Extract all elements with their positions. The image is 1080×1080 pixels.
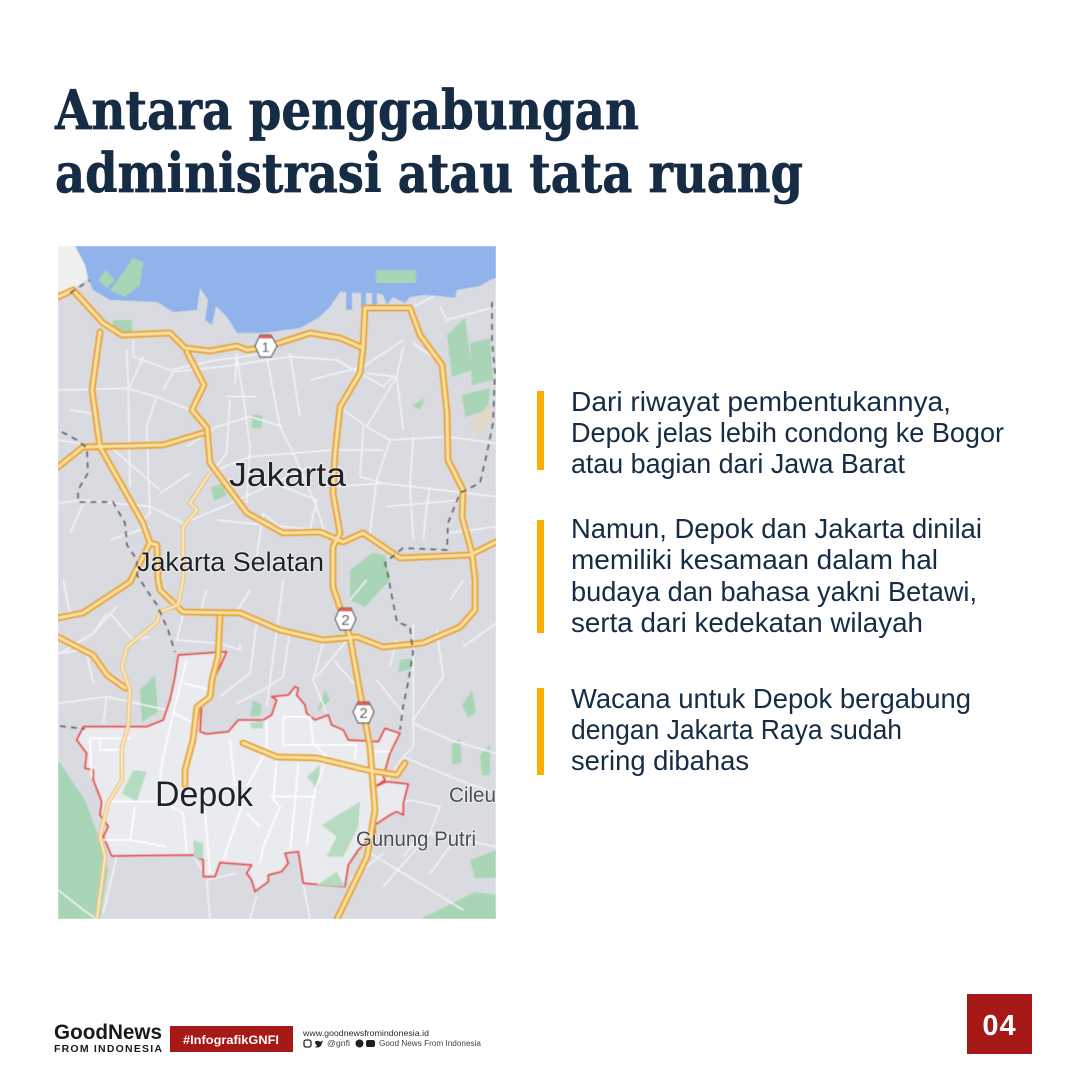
website and social handles [302,1028,482,1048]
icon: instagram [304,1040,311,1047]
text block 1 [537,386,1004,479]
map of Jakarta and Depok [58,246,496,919]
page number: 04 [982,1010,1017,1042]
map labels [137,456,496,851]
title: Antara penggabungan [54,78,639,142]
Depok green patches [122,720,360,887]
highways [58,290,496,919]
website and social handles: @gnfi [327,1039,350,1048]
map labels: Cileu [449,784,496,807]
Depok inner roads [90,660,390,873]
district borders [60,280,495,730]
sea [75,246,496,333]
sand patch [470,403,492,437]
map labels: Jakarta [229,456,347,493]
hashtag badge: #InfografikGNFI [183,1033,279,1047]
highway shield 2 lower [353,702,374,723]
text block 2: Namun, Depok dan Jakarta dinilai [571,513,982,544]
hashtag badge [170,1026,293,1052]
title: administrasi atau tata ruang [55,141,803,205]
text block 1: atau bagian dari Jawa Barat [571,448,905,479]
logo: GoodNews From Indonesia: GoodNews [54,1021,162,1044]
icon: facebook [356,1040,364,1048]
highway shield 2 lower: 2 [359,705,368,722]
Depok area [77,652,408,892]
text block 1: Depok jelas lebih condong ke Bogor [571,417,1004,448]
website and social handles: www.goodnewsfromindonesia.id [302,1028,429,1038]
highway shield 1: 1 [262,339,270,355]
highway shield 2 upper [335,608,356,630]
text block 2: budaya dan bahasa yakni Betawi, [571,576,977,607]
highway shield 2 upper: 2 [341,612,350,629]
text block 2 [537,513,982,638]
text block 2: memiliki kesamaan dalam hal [571,544,938,575]
logo: GoodNews From Indonesia [54,1021,162,1055]
highway shield 1 [255,335,277,357]
minor roads [58,297,496,557]
website and social handles: Good News From Indonesia [379,1039,482,1048]
green areas [58,258,496,919]
text block 2: serta dari kedekatan wilayah [571,607,923,638]
text block 1: Dari riwayat pembentukannya, [571,386,951,417]
map labels: Gunung Putri [356,828,476,851]
text block 3: dengan Jakarta Raya sudah [571,714,902,745]
text block 3: Wacana untuk Depok bergabung [571,683,971,714]
text block 3: sering dibahas [571,745,749,776]
text block 3 [537,683,971,776]
map labels: Jakarta Selatan [137,547,324,577]
map labels: Depok [155,775,253,814]
icon: twitter [314,1040,323,1048]
page number [967,994,1032,1054]
title [54,78,803,205]
icon: youtube [366,1040,375,1047]
logo: GoodNews From Indonesia: FROM INDONESIA [54,1043,162,1055]
northwest land [58,246,88,292]
